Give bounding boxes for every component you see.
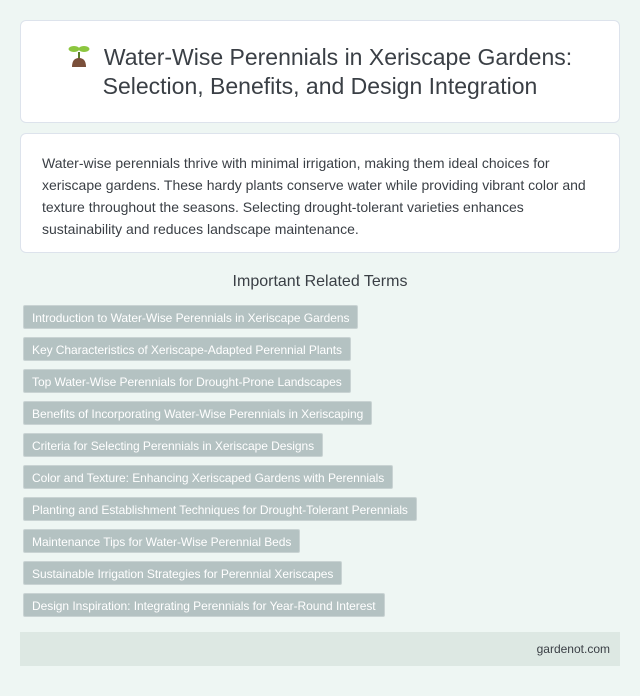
tag 4 <box>23 401 372 425</box>
tag 2 <box>23 337 351 361</box>
tag 3 <box>23 369 351 393</box>
tag 9: Sustainable Irrigation Strategies for Perennial Xeriscapes <box>32 567 333 581</box>
header card <box>20 20 620 123</box>
tag 10 <box>23 593 385 617</box>
tag 8: Maintenance Tips for Water-Wise Perennial Beds <box>32 535 291 549</box>
tag 5 <box>23 433 323 457</box>
tag 6 <box>23 465 393 489</box>
tag 4: Benefits of Incorporating Water-Wise Perennials in Xeriscaping <box>32 407 363 421</box>
tag 3: Top Water-Wise Perennials for Drought-Prone Landscapes <box>32 375 342 389</box>
tag 7 <box>23 497 417 521</box>
title: Water-Wise Perennials in Xeriscape Gardens: <box>104 44 572 70</box>
icon: seedling <box>68 46 90 67</box>
tag 1 <box>23 305 358 329</box>
footer text: gardenot.com <box>537 642 610 656</box>
tag 1: Introduction to Water-Wise Perennials in Xeriscape Gardens <box>32 311 349 325</box>
tag 6: Color and Texture: Enhancing Xeriscaped Gardens with Perennials <box>32 471 384 485</box>
tag 5: Criteria for Selecting Perennials in Xeriscape Designs <box>32 439 314 453</box>
tag 2: Key Characteristics of Xeriscape-Adapted Perennial Plants <box>32 343 342 357</box>
tag 8 <box>23 529 300 553</box>
footer <box>20 632 620 666</box>
title: Selection, Benefits, and Design Integration <box>103 73 537 99</box>
description card <box>20 133 620 253</box>
tag 10: Design Inspiration: Integrating Perennials for Year-Round Interest <box>32 599 376 613</box>
section heading: Important Related Terms <box>233 273 407 290</box>
description text: Water-wise perennials thrive with minimal irrigation, making them ideal choices for xeriscape gardens. These hardy plants conserve water while providing vibrant color and texture throughout the seasons. Selecting drought-tolerant varieties enhances sustainability and reduces landscape maintenance. <box>42 155 586 237</box>
tag 7: Planting and Establishment Techniques for Drought-Tolerant Perennials <box>32 503 408 517</box>
tag 9 <box>23 561 342 585</box>
title <box>68 44 572 99</box>
